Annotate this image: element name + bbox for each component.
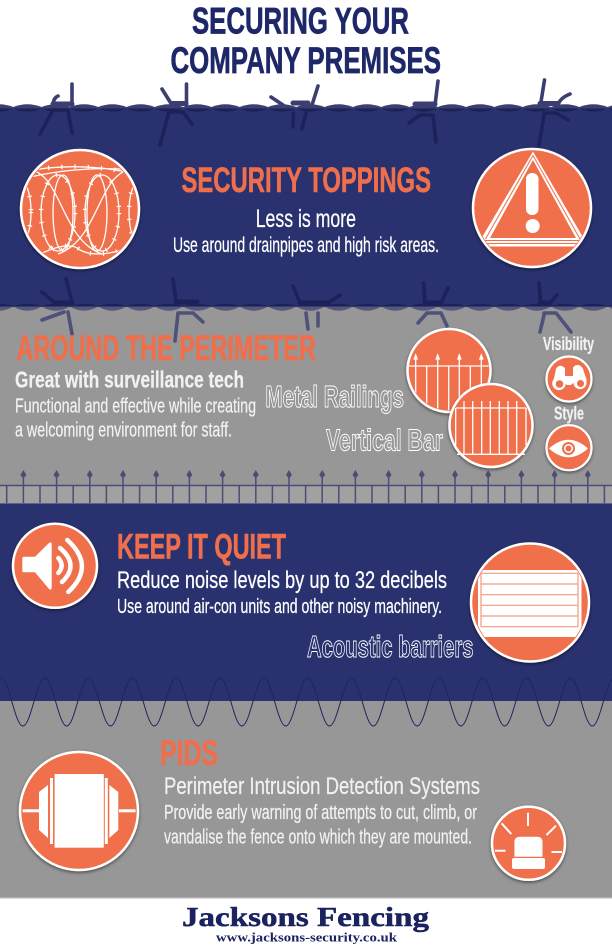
- icon: warning triangle: [470, 149, 595, 267]
- text: keep it quiet: KEEP IT QUIET: [117, 528, 286, 566]
- icon: eye: [546, 425, 592, 470]
- label: acoustic barriers: Acoustic barriers: [307, 629, 474, 664]
- website url: www.jacksons-security.co.uk: [216, 930, 398, 945]
- panel: keep it quiet background: [0, 504, 612, 702]
- title: [170, 0, 441, 81]
- text: PIDS: Perimeter Intrusion Detection Systems: [164, 773, 480, 800]
- icon: binoculars: [546, 356, 592, 402]
- text: around the perimeter: Great with surveillance tech: [15, 367, 244, 393]
- panel: PIDS background: [0, 701, 612, 898]
- text: security toppings: SECURITY TOPPINGS: [182, 161, 431, 200]
- sound wave line: [0, 678, 612, 726]
- text: around the perimeter: Functional and effective while creating: [15, 396, 256, 418]
- footer divider: [0, 898, 612, 899]
- text: keep it quiet: Use around air-con units and other noisy machinery.: [117, 596, 442, 618]
- barbed wire: middle: [0, 279, 612, 341]
- title: COMPANY PREMISES: [170, 40, 441, 81]
- icon: razor wire: [15, 150, 145, 268]
- text: around the perimeter: AROUND THE PERIMETER: [16, 329, 316, 368]
- text: around the perimeter: [15, 329, 316, 442]
- text: security toppings: Less is more: [256, 205, 356, 233]
- label: style: Style: [554, 403, 584, 423]
- text: PIDS: [160, 734, 480, 848]
- text: security toppings: Use around drainpipes and high risk areas.: [173, 234, 439, 257]
- text: PIDS: vandalise the fence onto which they are mounted.: [164, 826, 472, 848]
- title: SECURING YOUR: [192, 0, 409, 42]
- icon: acoustic barrier: [471, 544, 589, 662]
- text: security toppings: [173, 161, 439, 257]
- icon: intrusion sensor: [20, 752, 138, 870]
- panel: around the perimeter background: [0, 307, 612, 504]
- fence: [0, 470, 612, 503]
- icon: speaker: [13, 524, 97, 608]
- label: vertical bar: Vertical Bar: [326, 423, 443, 458]
- label: metal railings: Metal Railings: [265, 379, 404, 414]
- icon: alarm beacon: [492, 807, 565, 880]
- text: around the perimeter: a welcoming environment for staff.: [15, 420, 232, 442]
- text: PIDS: PIDS: [160, 734, 218, 773]
- text: keep it quiet: Reduce noise levels by up to 32 decibels: [117, 567, 447, 594]
- text: PIDS: Provide early warning of attempts to cut, climb, or: [164, 802, 477, 824]
- icon: metal railings: [405, 329, 493, 412]
- logo: Jacksons Fencing: Jacksons Fencing: [182, 902, 430, 932]
- text: keep it quiet: [117, 528, 447, 618]
- panel: security toppings background: [0, 109, 612, 307]
- icon: vertical bar fence: [450, 384, 532, 467]
- barbed wire: top: [0, 80, 612, 145]
